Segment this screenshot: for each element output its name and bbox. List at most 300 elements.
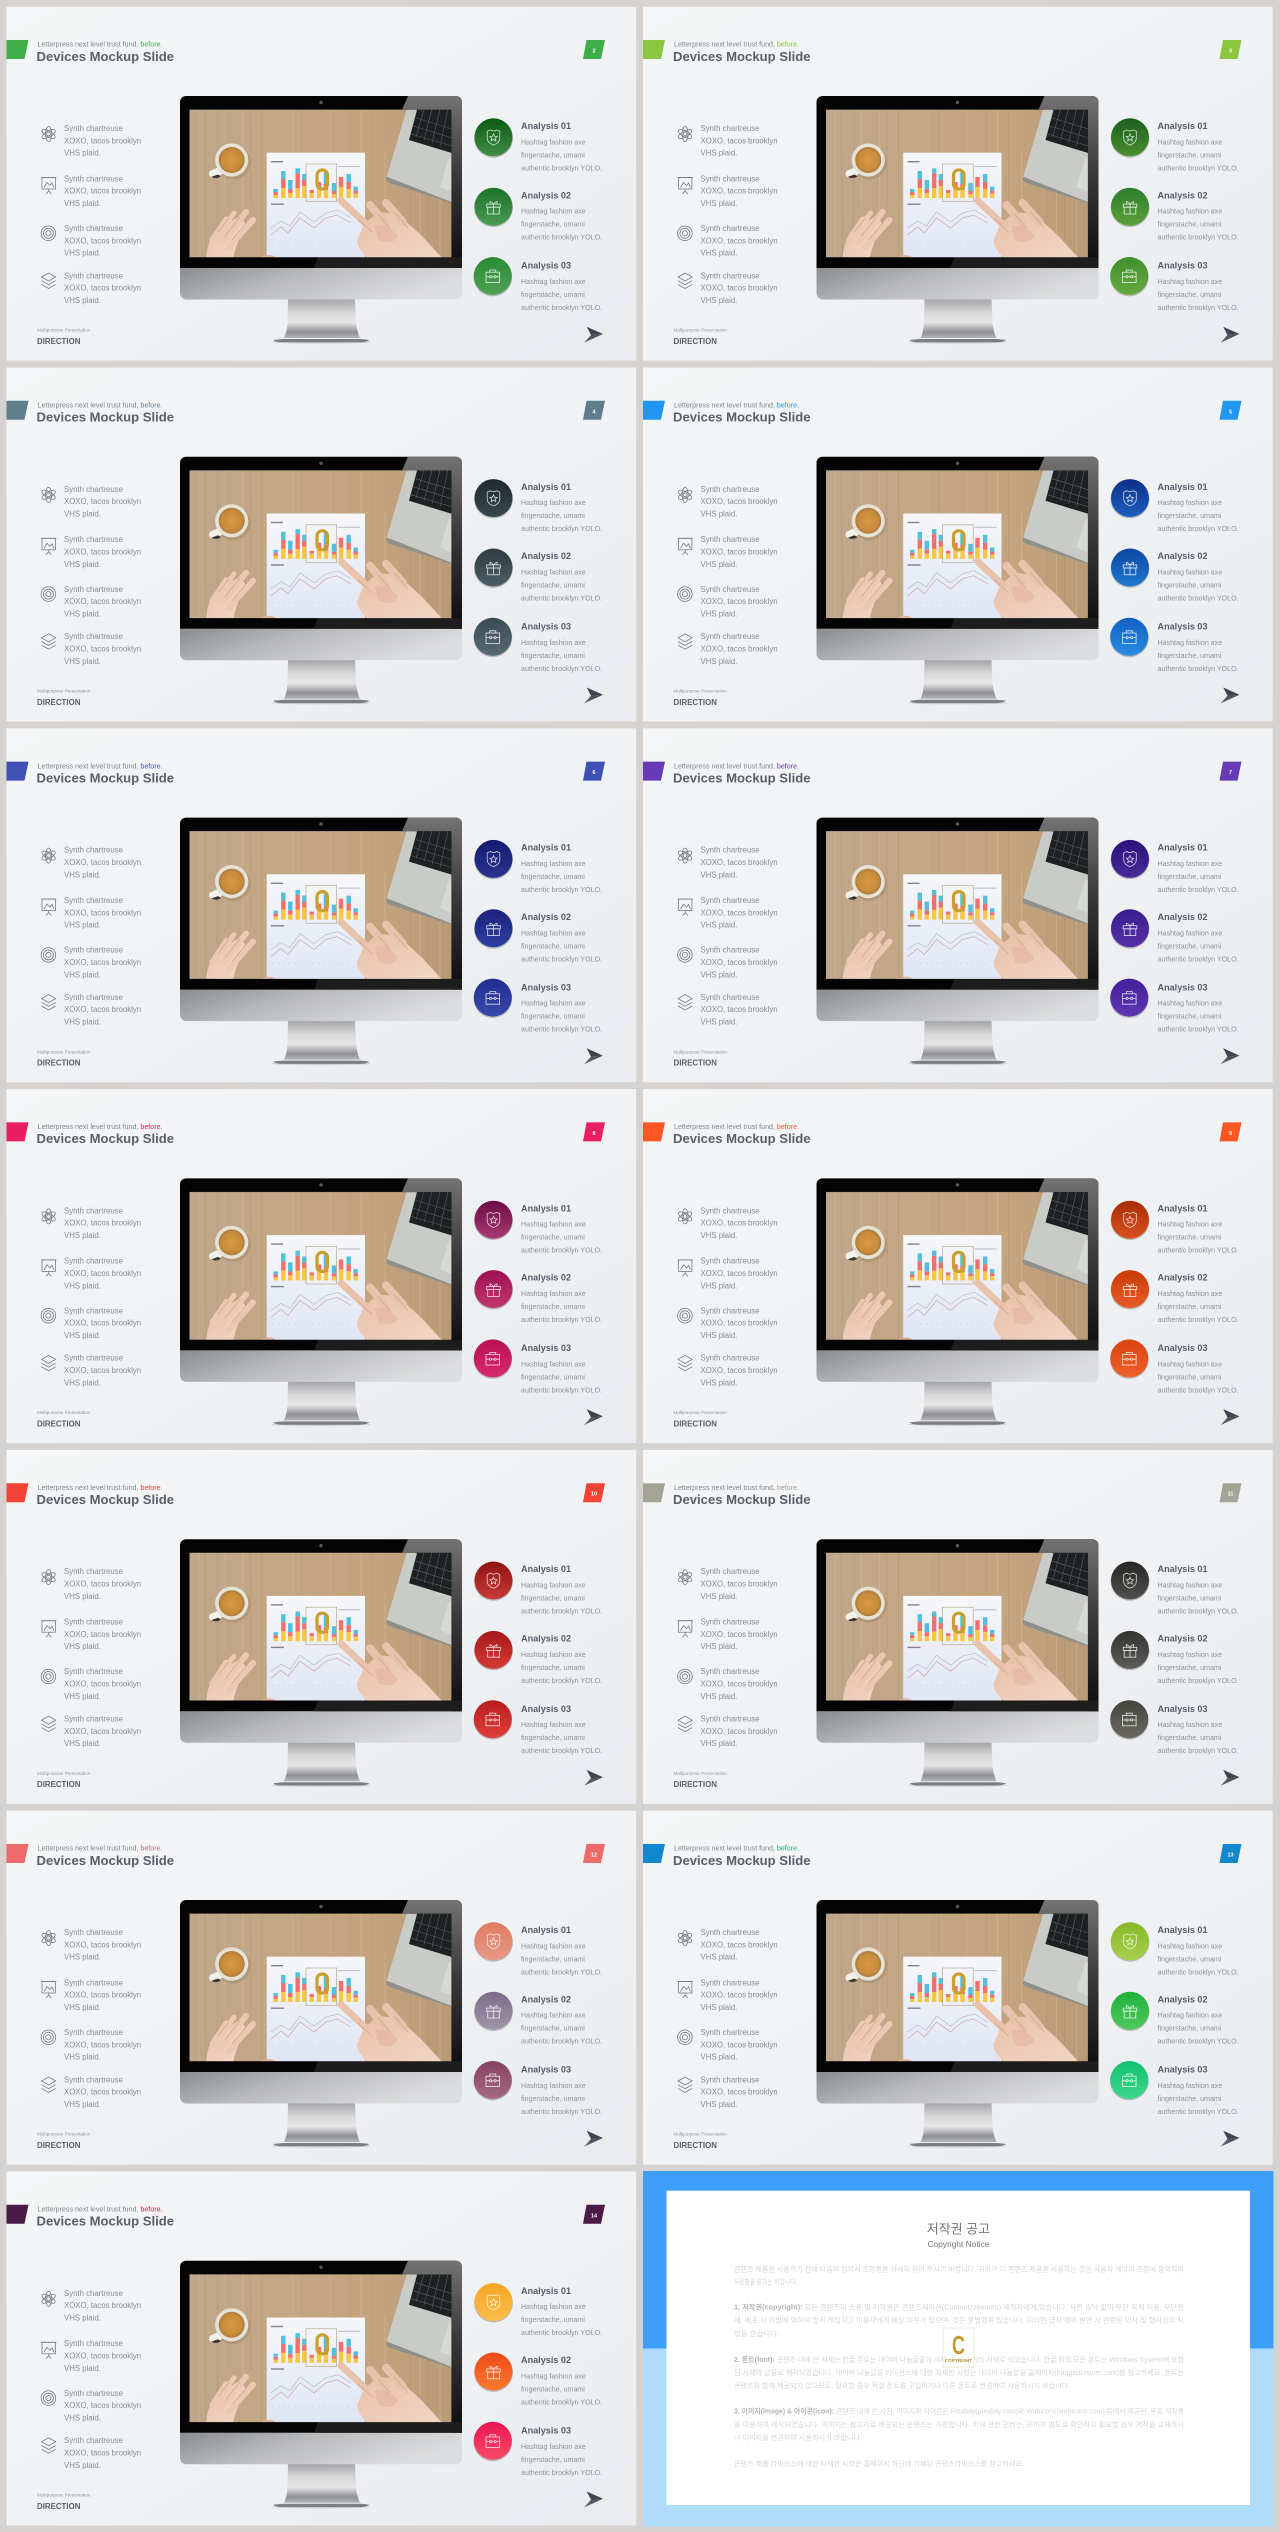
slide background <box>6 7 636 361</box>
analysis text <box>1158 482 1239 673</box>
left text list: VHS plaid. <box>64 2100 101 2109</box>
left text list: VHS plaid. <box>64 657 101 666</box>
footer label <box>674 328 727 346</box>
left text list: VHS plaid. <box>700 1331 737 1340</box>
panel: slide 8 <box>6 1089 636 1443</box>
analysis text: authentic brooklyn YOLO. <box>521 1026 602 1034</box>
analysis text: fingerstache, umami <box>1158 2095 1222 2103</box>
analysis text: authentic brooklyn YOLO. <box>1158 525 1239 533</box>
panel: slide 4 <box>6 368 636 722</box>
left text list: Synth chartreuse <box>64 271 123 280</box>
analysis text: Hashtag fashion axe <box>521 1221 586 1229</box>
analysis text: fingerstache, umami <box>521 873 585 881</box>
icon: paper plane <box>584 1409 603 1425</box>
analysis text: fingerstache, umami <box>1158 942 1222 950</box>
left text list: Synth chartreuse <box>700 224 759 233</box>
left text list: XOXO, tacos brooklyn <box>64 284 141 293</box>
left text list: XOXO, tacos brooklyn <box>64 1579 141 1588</box>
left text list: VHS plaid. <box>700 1378 737 1387</box>
heading: Devices Mockup Slide <box>36 2214 174 2229</box>
footer label: DIRECTION <box>37 1780 81 1789</box>
analysis text: fingerstache, umami <box>521 942 585 950</box>
footer label <box>37 328 91 346</box>
left text list: VHS plaid. <box>64 1231 101 1240</box>
analysis text: Analysis 03 <box>1158 982 1208 992</box>
left text list: XOXO, tacos brooklyn <box>700 644 778 653</box>
heading: Devices Mockup Slide <box>673 1131 811 1146</box>
page number badge: 14 <box>591 2213 598 2219</box>
left text list: VHS plaid. <box>64 1642 101 1651</box>
left text list: XOXO, tacos brooklyn <box>64 2088 141 2097</box>
left text list: XOXO, tacos brooklyn <box>64 597 141 606</box>
analysis text: Hashtag fashion axe <box>1158 2082 1222 2090</box>
subtitle: Letterpress next level trust fund, before. <box>674 1484 799 1492</box>
analysis text: Hashtag fashion axe <box>1158 568 1222 576</box>
left text list: VHS plaid. <box>64 1378 101 1387</box>
analysis text: fingerstache, umami <box>1158 1594 1222 1602</box>
analysis text: fingerstache, umami <box>521 1373 585 1381</box>
analysis text: Analysis 01 <box>521 1203 571 1213</box>
analysis text: Hashtag fashion axe <box>1158 1290 1222 1298</box>
left icons <box>41 848 57 1010</box>
left text list: VHS plaid. <box>700 657 737 666</box>
analysis text: authentic brooklyn YOLO. <box>1158 164 1239 172</box>
analysis text: Hashtag fashion axe <box>1158 639 1222 647</box>
footer label: Multipurpose Presentation <box>674 2132 727 2137</box>
slide background <box>643 1089 1273 1443</box>
analysis text: Hashtag fashion axe <box>521 1000 586 1008</box>
left text list: XOXO, tacos brooklyn <box>700 1940 778 1949</box>
heading: Devices Mockup Slide <box>36 1131 174 1146</box>
analysis text: authentic brooklyn YOLO. <box>521 955 602 963</box>
left text list: Synth chartreuse <box>700 585 759 594</box>
analysis text: Analysis 01 <box>521 1564 571 1574</box>
footer label: DIRECTION <box>674 2141 717 2150</box>
analysis text: authentic brooklyn YOLO. <box>1158 1607 1239 1615</box>
analysis text: fingerstache, umami <box>1158 1955 1222 1963</box>
analysis text: authentic brooklyn YOLO. <box>521 1607 602 1615</box>
analysis text: Analysis 02 <box>521 1994 571 2004</box>
left text list: Synth chartreuse <box>700 2075 759 2084</box>
left text list: VHS plaid. <box>64 1953 101 1962</box>
analysis text: Analysis 02 <box>1158 1994 1208 2004</box>
left text list: VHS plaid. <box>64 1592 101 1601</box>
left text list: Synth chartreuse <box>64 1714 123 1723</box>
left text list: XOXO, tacos brooklyn <box>64 858 141 867</box>
left text list: VHS plaid. <box>64 1018 101 1027</box>
page number badge <box>583 1483 605 1502</box>
left text list: Synth chartreuse <box>64 632 123 641</box>
heading: Devices Mockup Slide <box>673 49 811 64</box>
page number badge: 8 <box>592 1131 596 1137</box>
analysis text: Analysis 02 <box>1158 190 1208 200</box>
left text list: Synth chartreuse <box>64 993 123 1002</box>
panel: slide 13 <box>643 1811 1273 2165</box>
analysis text: Analysis 01 <box>1158 1564 1208 1574</box>
notice body text: 사용함을 밝히는 바입니다. <box>734 2277 797 2286</box>
analysis text: fingerstache, umami <box>1158 2025 1222 2033</box>
footer label <box>37 1410 91 1428</box>
accent tab <box>6 762 28 781</box>
analysis text: Analysis 01 <box>521 1925 571 1935</box>
left text list: VHS plaid. <box>64 149 101 158</box>
analysis text: authentic brooklyn YOLO. <box>1158 2108 1239 2116</box>
analysis text: Hashtag fashion axe <box>1158 278 1222 286</box>
panel: slide 7 <box>643 728 1273 1082</box>
analysis text: fingerstache, umami <box>1158 151 1222 159</box>
analysis text: Hashtag fashion axe <box>1158 2012 1222 2020</box>
icon: paper plane <box>1220 2131 1240 2147</box>
notice title: 저작권 공고 <box>927 2222 990 2236</box>
analysis text: fingerstache, umami <box>521 151 585 159</box>
heading: Devices Mockup Slide <box>36 1492 174 1507</box>
analysis text: Analysis 01 <box>1158 1203 1208 1213</box>
analysis text: Hashtag fashion axe <box>521 860 586 868</box>
footer label <box>37 1771 91 1789</box>
subtitle: Letterpress next level trust fund, before. <box>674 1123 799 1131</box>
analysis text: Analysis 03 <box>1158 261 1208 271</box>
left icons <box>41 1930 57 2092</box>
panel: slide 11 <box>643 1450 1273 1804</box>
analysis text: fingerstache, umami <box>521 221 585 229</box>
left text list: Synth chartreuse <box>64 1257 123 1266</box>
left text list: XOXO, tacos brooklyn <box>700 136 778 145</box>
left text list: XOXO, tacos brooklyn <box>700 497 778 506</box>
panel: slide 10 <box>6 1450 636 1804</box>
analysis text: Hashtag fashion axe <box>1158 1221 1222 1229</box>
left text list: VHS plaid. <box>64 1692 101 1701</box>
left text list: VHS plaid. <box>700 609 737 618</box>
monitor mockup <box>816 96 1098 344</box>
analysis text: Analysis 02 <box>521 912 571 922</box>
analysis text: authentic brooklyn YOLO. <box>521 234 602 242</box>
analysis text: fingerstache, umami <box>521 1594 585 1602</box>
left text list: Synth chartreuse <box>700 1206 759 1215</box>
analysis text: fingerstache, umami <box>1158 1013 1222 1021</box>
analysis text: Hashtag fashion axe <box>521 2373 586 2381</box>
icon: paper plane <box>584 2492 603 2508</box>
white notice card <box>666 2191 1250 2505</box>
analysis text: authentic brooklyn YOLO. <box>521 2329 602 2337</box>
left text list: VHS plaid. <box>700 2100 737 2109</box>
left text list: XOXO, tacos brooklyn <box>64 1219 141 1228</box>
analysis text: fingerstache, umami <box>521 1234 585 1242</box>
footer label: DIRECTION <box>37 1419 81 1428</box>
left text list: VHS plaid. <box>64 1331 101 1340</box>
analysis text: Analysis 02 <box>1158 551 1208 561</box>
analysis text: authentic brooklyn YOLO. <box>521 665 602 673</box>
analysis text: authentic brooklyn YOLO. <box>1158 594 1239 602</box>
accent tab <box>643 1122 665 1141</box>
left text list: Synth chartreuse <box>64 535 123 544</box>
analysis text: Analysis 01 <box>1158 121 1208 131</box>
subtitle: Letterpress next level trust fund, before. <box>674 41 799 49</box>
left text list: Synth chartreuse <box>64 1567 123 1576</box>
subtitle: Letterpress next level trust fund, before. <box>38 1484 163 1492</box>
slide background <box>6 728 636 1082</box>
analysis text: Hashtag fashion axe <box>521 1290 586 1298</box>
subtitle: Letterpress next level trust fund, before. <box>38 401 163 409</box>
left text list: XOXO, tacos brooklyn <box>64 1319 141 1328</box>
left text list: Synth chartreuse <box>64 846 123 855</box>
icon: paper plane <box>584 688 603 704</box>
left text list: Synth chartreuse <box>700 1928 759 1937</box>
monitor mockup <box>180 1539 462 1787</box>
left text list: Synth chartreuse <box>64 1978 123 1987</box>
analysis text: Hashtag fashion axe <box>521 568 586 576</box>
left text list: Synth chartreuse <box>700 1617 759 1626</box>
left text list: Synth chartreuse <box>700 896 759 905</box>
left text list: XOXO, tacos brooklyn <box>64 187 141 196</box>
analysis text: Hashtag fashion axe <box>521 1360 586 1368</box>
icon: paper plane <box>1220 1770 1240 1786</box>
logo watermark: COPYRIGHT <box>945 2358 972 2363</box>
footer label: Multipurpose Presentation <box>37 2493 91 2498</box>
monitor mockup <box>816 457 1098 704</box>
analysis text: authentic brooklyn YOLO. <box>521 594 602 602</box>
left text list: Synth chartreuse <box>700 535 759 544</box>
analysis text: authentic brooklyn YOLO. <box>1158 886 1239 894</box>
footer label: DIRECTION <box>674 337 717 346</box>
left text list: XOXO, tacos brooklyn <box>700 1630 778 1639</box>
left text list: XOXO, tacos brooklyn <box>700 908 778 917</box>
left text list: VHS plaid. <box>64 2461 101 2470</box>
footer label: DIRECTION <box>674 1780 717 1789</box>
analysis text: Hashtag fashion axe <box>1158 138 1222 146</box>
analysis text <box>521 1564 602 1755</box>
left text list: XOXO, tacos brooklyn <box>700 1366 778 1375</box>
left text list: VHS plaid. <box>64 199 101 208</box>
analysis text: authentic brooklyn YOLO. <box>521 1747 602 1755</box>
accent tab <box>643 40 665 59</box>
left text list: VHS plaid. <box>64 1281 101 1290</box>
notice body text: 된 서체와 글꼴로 제작되었습니다. 네이버 나눔글꼴 라이선스에 대한 자세한 사항은 네이버 나눔글꼴 홈페이지(hangeul.naver.com)를 참고하세요. 폰트는 <box>734 2368 1185 2377</box>
analysis text: fingerstache, umami <box>1158 652 1222 660</box>
analysis text: authentic brooklyn YOLO. <box>1158 1747 1239 1755</box>
left text list: VHS plaid. <box>64 2003 101 2012</box>
analysis text: Analysis 01 <box>1158 843 1208 853</box>
page number badge <box>583 1122 605 1141</box>
analysis text <box>521 482 602 673</box>
analysis text: Analysis 02 <box>521 1273 571 1283</box>
notice body text: 콘텐츠의 함께 제공되지 않으므로, 필요할 경우 적절 폰트를 구입하거나 다른 폰트로 변경하여 사용하시기 바랍니다. <box>734 2381 1070 2390</box>
left text list: VHS plaid. <box>700 1018 737 1027</box>
left text list: XOXO, tacos brooklyn <box>700 547 778 556</box>
left text list: Synth chartreuse <box>700 124 759 133</box>
left icons <box>41 126 57 288</box>
analysis text: fingerstache, umami <box>521 581 585 589</box>
left text list: VHS plaid. <box>700 970 737 979</box>
analysis text: authentic brooklyn YOLO. <box>521 1968 602 1976</box>
heading: Devices Mockup Slide <box>673 410 811 425</box>
subtitle: Letterpress next level trust fund, before. <box>38 1845 163 1853</box>
icon: paper plane <box>1220 1048 1240 1064</box>
footer label: Multipurpose Presentation <box>37 328 91 333</box>
analysis badges <box>473 118 513 296</box>
accent tab <box>643 1483 665 1502</box>
analysis text: authentic brooklyn YOLO. <box>521 304 602 312</box>
left text list: Synth chartreuse <box>700 946 759 955</box>
analysis text: Hashtag fashion axe <box>1158 208 1222 216</box>
analysis text: fingerstache, umami <box>521 1303 585 1311</box>
page number badge: 12 <box>591 1852 597 1858</box>
monitor mockup <box>180 1178 462 1426</box>
analysis badges <box>473 1922 513 2100</box>
page number badge: 2 <box>592 48 596 54</box>
notice body text: 재, 배포 시 민법에 의하여 엄히 책임지고 이용자에게 배상 의무가 있으며, 것은 불법행위 있습니다. 이러한 금지 행위 발견 시 관련된 민사 및 형사상의 사 <box>734 2316 1185 2324</box>
panel: slide 3 <box>643 7 1273 361</box>
analysis text: authentic brooklyn YOLO. <box>1158 955 1239 963</box>
analysis text: Hashtag fashion axe <box>521 208 586 216</box>
analysis text: authentic brooklyn YOLO. <box>521 1247 602 1255</box>
panel: slide 14 <box>6 2172 636 2526</box>
left text list: XOXO, tacos brooklyn <box>64 1991 141 2000</box>
left text list: VHS plaid. <box>700 1953 737 1962</box>
analysis text: Analysis 01 <box>1158 1925 1208 1935</box>
slide background <box>643 368 1273 722</box>
left text list: XOXO, tacos brooklyn <box>700 1991 778 2000</box>
analysis text: Analysis 03 <box>1158 2065 1208 2075</box>
left text list: XOXO, tacos brooklyn <box>64 1679 141 1688</box>
footer label <box>674 1771 727 1789</box>
analysis badges <box>1110 840 1149 1018</box>
analysis text: Hashtag fashion axe <box>521 138 586 146</box>
footer label: Multipurpose Presentation <box>37 1410 91 1415</box>
analysis text: Analysis 02 <box>1158 1633 1208 1643</box>
analysis text: fingerstache, umami <box>521 2025 585 2033</box>
monitor mockup <box>180 1900 462 2148</box>
left text list: XOXO, tacos brooklyn <box>700 1269 778 1278</box>
left text list: Synth chartreuse <box>700 1306 759 1315</box>
analysis text: Hashtag fashion axe <box>521 2443 586 2451</box>
left text list: Synth chartreuse <box>700 1354 759 1363</box>
accent tab <box>6 40 28 59</box>
left text list: XOXO, tacos brooklyn <box>700 1319 778 1328</box>
left text list: XOXO, tacos brooklyn <box>700 858 778 867</box>
left text list: VHS plaid. <box>700 199 737 208</box>
analysis text: authentic brooklyn YOLO. <box>521 2038 602 2046</box>
left text list: Synth chartreuse <box>64 174 123 183</box>
analysis text: authentic brooklyn YOLO. <box>1158 665 1239 673</box>
analysis badges <box>1110 1562 1149 1740</box>
analysis text: Hashtag fashion axe <box>521 2012 586 2020</box>
analysis text: Hashtag fashion axe <box>1158 1581 1222 1589</box>
left text list: XOXO, tacos brooklyn <box>64 2352 141 2361</box>
left text list: VHS plaid. <box>700 2003 737 2012</box>
left text list: VHS plaid. <box>64 296 101 305</box>
left text list: Synth chartreuse <box>700 1714 759 1723</box>
analysis text: fingerstache, umami <box>1158 581 1222 589</box>
analysis text: Analysis 03 <box>521 622 571 632</box>
analysis text: authentic brooklyn YOLO. <box>521 1677 602 1685</box>
monitor mockup <box>180 457 462 704</box>
notice body text <box>734 2264 1185 2468</box>
heading: Devices Mockup Slide <box>673 1853 811 1868</box>
blue background top <box>643 2171 1274 2348</box>
left icons <box>677 1209 693 1371</box>
analysis text: Hashtag fashion axe <box>521 2082 586 2090</box>
left text list: XOXO, tacos brooklyn <box>64 908 141 917</box>
analysis text: Analysis 01 <box>521 843 571 853</box>
analysis text: Analysis 02 <box>521 190 571 200</box>
notice body text: 법을 받습니다. <box>734 2329 779 2338</box>
footer label <box>674 2132 727 2150</box>
panel: slide 9 <box>643 1089 1273 1443</box>
footer label <box>674 1049 727 1068</box>
left text list: XOXO, tacos brooklyn <box>700 1219 778 1228</box>
icon: paper plane <box>584 327 603 343</box>
left text list: Synth chartreuse <box>700 271 759 280</box>
analysis text: Analysis 03 <box>521 982 571 992</box>
footer label: Multipurpose Presentation <box>37 688 91 694</box>
left text list: XOXO, tacos brooklyn <box>64 2301 141 2310</box>
analysis text: authentic brooklyn YOLO. <box>521 1386 602 1394</box>
analysis badges <box>1110 479 1149 657</box>
footer label <box>37 1049 91 1068</box>
left text list: XOXO, tacos brooklyn <box>700 1579 778 1588</box>
left text list: XOXO, tacos brooklyn <box>64 497 141 506</box>
left text list: Synth chartreuse <box>64 1354 123 1363</box>
slide background <box>6 2172 636 2526</box>
left text list: VHS plaid. <box>700 249 737 258</box>
left text list: VHS plaid. <box>64 2414 101 2423</box>
analysis badges <box>473 1562 513 1740</box>
notice subtitle: Copyright Notice <box>927 2239 990 2249</box>
left text list: Synth chartreuse <box>700 632 759 641</box>
analysis text: fingerstache, umami <box>521 2095 585 2103</box>
icon: paper plane <box>584 2131 603 2147</box>
heading: Devices Mockup Slide <box>36 770 174 785</box>
slide background <box>643 728 1273 1082</box>
subtitle: Letterpress next level trust fund, before. <box>674 1845 799 1853</box>
notice body text: 을 이용하여 제작되었습니다. 이미지는 참고자료 제공되는 콘텐츠는 가정합니다. 이에 관한 권리는, 귀하가 별도로 확인하고 필요할 경우 저작물 교체하시 <box>734 2420 1184 2429</box>
left text list: XOXO, tacos brooklyn <box>64 644 141 653</box>
slide background <box>6 1089 636 1443</box>
left text list: XOXO, tacos brooklyn <box>64 1940 141 1949</box>
left text list: XOXO, tacos brooklyn <box>64 547 141 556</box>
analysis text: authentic brooklyn YOLO. <box>1158 1386 1239 1394</box>
icon: paper plane <box>584 1770 603 1786</box>
analysis text: authentic brooklyn YOLO. <box>521 2108 602 2116</box>
left text list: XOXO, tacos brooklyn <box>700 1679 778 1688</box>
footer label: DIRECTION <box>674 1059 717 1068</box>
analysis text: Hashtag fashion axe <box>1158 860 1222 868</box>
analysis text: Analysis 03 <box>521 1704 571 1714</box>
left text list: Synth chartreuse <box>700 993 759 1002</box>
analysis text: Hashtag fashion axe <box>521 2303 586 2311</box>
left text list: XOXO, tacos brooklyn <box>700 2040 778 2049</box>
left text list: VHS plaid. <box>64 2314 101 2323</box>
left text list: Synth chartreuse <box>64 1206 123 1215</box>
analysis text: Analysis 03 <box>1158 1704 1208 1714</box>
analysis badges <box>473 840 513 1018</box>
footer label <box>37 2132 91 2150</box>
analysis text: authentic brooklyn YOLO. <box>521 2469 602 2477</box>
heading: Devices Mockup Slide <box>36 49 174 64</box>
analysis text: fingerstache, umami <box>521 2456 585 2464</box>
analysis text: fingerstache, umami <box>521 1955 585 1963</box>
left text list: VHS plaid. <box>64 970 101 979</box>
analysis text: fingerstache, umami <box>1158 873 1222 881</box>
analysis badges <box>1110 1922 1149 2100</box>
notice body text: 콘텐츠 제품을 사용하기 전에 다음의 협약서 조항들을 자세히 읽어 주시기 바랍니다. 귀하가 이 콘텐츠 제품을 사용하는 것은 사용자 계약의 조항에 동의하여 <box>734 2264 1184 2274</box>
analysis text: fingerstache, umami <box>1158 1664 1222 1672</box>
analysis text: Hashtag fashion axe <box>521 499 586 507</box>
analysis text: authentic brooklyn YOLO. <box>1158 1316 1239 1324</box>
left text list: VHS plaid. <box>64 1739 101 1748</box>
left text list: Synth chartreuse <box>64 2075 123 2084</box>
left text list: Synth chartreuse <box>64 224 123 233</box>
